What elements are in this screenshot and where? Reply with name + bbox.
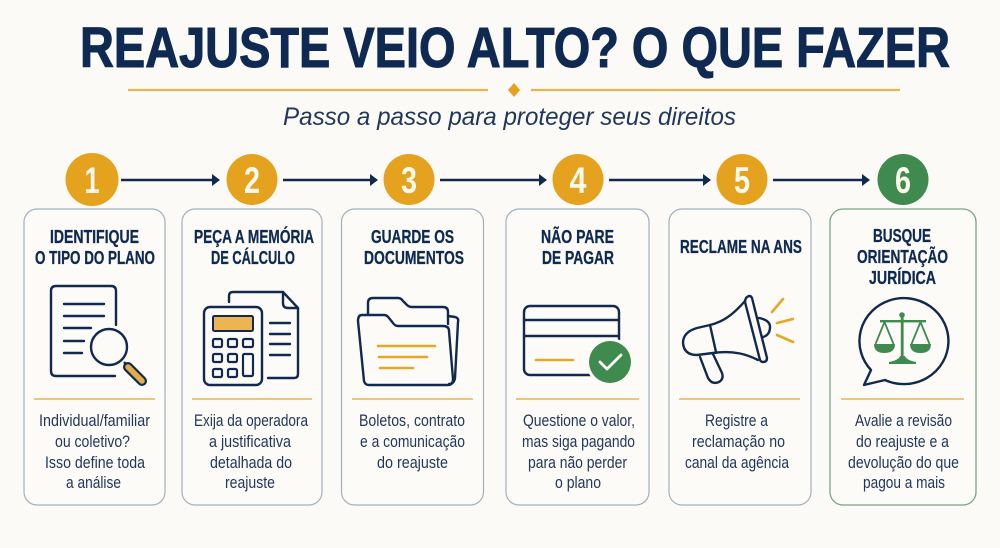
description [685, 412, 790, 472]
panel: peça a memória de cálculo [182, 209, 322, 505]
heading: GUARDE OS [371, 226, 454, 247]
heading [541, 226, 614, 268]
heading: IDENTIFIQUE [50, 226, 139, 247]
description: e a comunicação [360, 433, 465, 451]
description: a justificativa [209, 433, 292, 451]
description: Questione o valor, [523, 412, 635, 430]
description: devolução do que [848, 454, 959, 472]
description: Exija da operadora [194, 412, 309, 430]
description: ou coletivo? [55, 433, 130, 451]
description: para não perder [528, 454, 627, 472]
description: reclamação no [692, 433, 785, 451]
icon: folder [358, 298, 458, 385]
panel: não pare de pagar [506, 209, 649, 505]
heading: DOCUMENTOS [364, 247, 464, 268]
description: Registre a [705, 412, 769, 430]
heading [35, 226, 155, 268]
step number 5 [716, 154, 768, 205]
heading [194, 226, 314, 268]
step number 3: 3 [401, 160, 417, 201]
description [848, 412, 959, 492]
step number 2 [226, 154, 278, 205]
arrow 1 to 2 [121, 174, 220, 186]
step number 6 [878, 154, 928, 205]
step number 4: 4 [570, 160, 587, 201]
description: reajuste [225, 474, 275, 492]
description: do reajuste e a [856, 433, 950, 451]
description [359, 412, 465, 472]
icon: megaphone [683, 296, 793, 383]
icon: payment card with check [524, 306, 634, 386]
step timeline [66, 153, 928, 206]
description [522, 412, 635, 492]
heading: JURÍDICA [869, 267, 936, 288]
heading: O TIPO DO PLANO [35, 247, 155, 268]
description [39, 412, 150, 492]
subtitle: Passo a passo para proteger seus direitos [283, 103, 736, 131]
description: Isso define toda [45, 454, 146, 472]
heading: DE CÁLCULO [211, 247, 295, 268]
heading: DE PAGAR [542, 247, 614, 268]
description [194, 412, 309, 492]
step number 4 [552, 154, 604, 205]
step number 3 [384, 154, 434, 205]
panel: reclame na ANS [669, 209, 811, 505]
icon: speech bubble with scales [859, 298, 948, 385]
heading: ORIENTAÇÃO [857, 246, 948, 267]
panel: guarde os documentos [342, 209, 484, 505]
step number 5: 5 [734, 160, 750, 201]
description: Boletos, contrato [359, 412, 465, 430]
heading: NÃO PARE [541, 226, 614, 247]
heading [364, 226, 464, 268]
arrow 5 to 6 [773, 174, 870, 186]
arrow 3 to 4 [440, 174, 547, 186]
description: a análise [66, 474, 121, 492]
step number 2: 2 [244, 160, 260, 201]
arrow 2 to 3 [283, 174, 378, 186]
step number 1 [66, 153, 118, 206]
description: canal da agência [685, 454, 790, 472]
description: Individual/familiar [39, 412, 150, 430]
heading [857, 225, 948, 288]
icon: document with magnifier [51, 286, 142, 382]
description: pagou a mais [863, 474, 945, 492]
panel: busque orientação jurídica [830, 209, 976, 505]
heading: PEÇA A MEMÓRIA [194, 226, 314, 247]
panel: identifique o tipo do plano [24, 209, 165, 505]
step number 1: 1 [84, 160, 100, 201]
description: o plano [555, 474, 601, 492]
description: detalhada do [210, 454, 292, 472]
description: do reajuste [377, 454, 448, 472]
arrow 4 to 5 [609, 174, 711, 186]
heading: BUSQUE [873, 225, 931, 246]
icon: calculator and document [204, 292, 298, 385]
title divider with diamond [128, 83, 900, 97]
description: Avalie a revisão [855, 412, 952, 430]
description: mas siga pagando [522, 433, 635, 451]
step number 6: 6 [895, 160, 911, 201]
heading: RECLAME NA ANS [680, 236, 802, 257]
